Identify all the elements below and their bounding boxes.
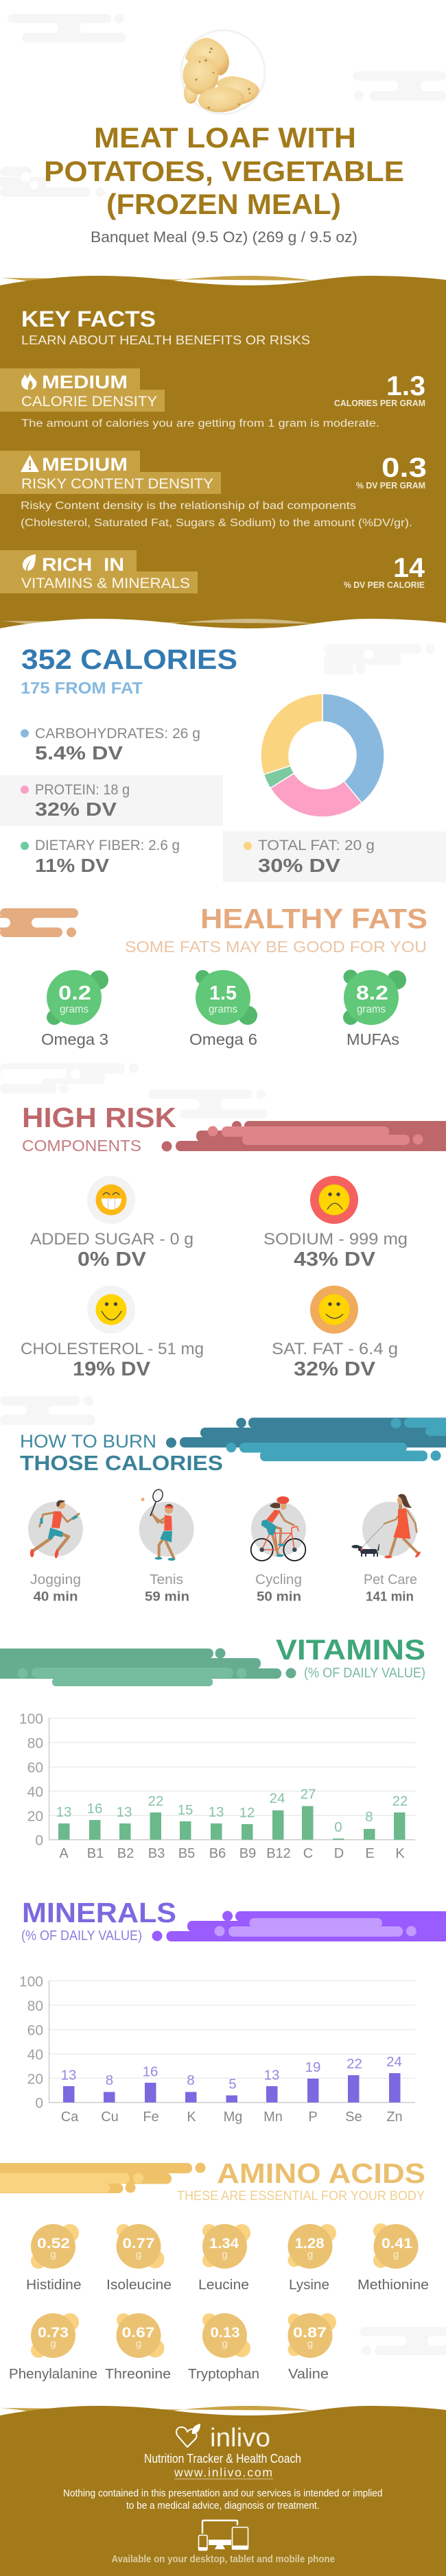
activity labels	[30, 1572, 417, 1604]
bar chart: vitamins: 100	[19, 1712, 43, 1727]
subtitle: Banquet Meal (9.5 Oz) (269 g / 9.5 oz)	[91, 228, 357, 246]
text: website: www.inlivo.com	[174, 2466, 272, 2479]
bubble: leucine	[198, 2224, 250, 2293]
bar chart: vitamins: 13	[56, 1804, 71, 1820]
bar chart: vitamins: B12	[266, 1846, 291, 1861]
logo text: inlivo: inlivo	[210, 2424, 270, 2453]
bubble: valine: 0.87	[293, 2325, 327, 2341]
bar chart: vitamins: 12	[239, 1805, 255, 1821]
bar chart: vitamins: B5	[178, 1846, 195, 1861]
bubble: threonine: g	[136, 2338, 141, 2350]
donut chart: macronutrient split	[261, 694, 384, 817]
bubble: isoleucine: g	[136, 2249, 141, 2260]
food photo: potatoes in a ring	[181, 30, 265, 114]
label box: risky content density: MEDIUM	[42, 454, 128, 475]
legend: dietary fiber: 11% DV	[35, 855, 109, 876]
bubble: phenylalanine: Phenylalanine	[9, 2367, 97, 2382]
activity labels: 40 min	[33, 1590, 78, 1604]
legend: dietary fiber: DIETARY FIBER: 2.6 g	[35, 838, 180, 853]
activity labels: Pet Care	[364, 1572, 417, 1587]
item: saturated fat: SAT. FAT - 6.4 g	[272, 1340, 398, 1358]
bar chart: vitamins: C	[303, 1846, 313, 1861]
bar chart: minerals: 40	[27, 2047, 43, 2063]
legend: total fat: 30% DV	[258, 855, 340, 876]
bubble: histidine: g	[50, 2249, 56, 2260]
icon: warning triangle	[21, 455, 39, 472]
bar chart: minerals: 60	[27, 2023, 43, 2039]
bubble: omega 6: grams	[209, 1004, 237, 1015]
legend: carbohydrates	[21, 726, 200, 764]
bubble: omega 3: Omega 3	[41, 1030, 108, 1048]
activity labels: Tenis	[150, 1572, 183, 1587]
bar chart: vitamins: 24	[270, 1791, 285, 1806]
stat: vitamins and minerals value: % DV PER CALORIE	[344, 580, 425, 590]
bubble: valine: g	[307, 2338, 313, 2350]
title: POTATOES, VEGETABLE	[44, 155, 404, 187]
bar chart: vitamins: B3	[148, 1846, 165, 1861]
item: saturated fat	[272, 1286, 398, 1380]
panel: calories	[0, 643, 446, 882]
bar chart: minerals: Fe	[143, 2110, 159, 2125]
icon: devices	[198, 2520, 248, 2551]
subheading: daily value: (% OF DAILY VALUE)	[304, 1666, 425, 1681]
bubble: phenylalanine	[9, 2313, 97, 2382]
banner: healthy fats cloud	[0, 908, 78, 937]
heading: key facts: KEY FACTS	[21, 307, 156, 331]
heading: those calories: THOSE CALORIES	[20, 1451, 223, 1475]
bar chart: vitamins: B9	[239, 1846, 256, 1861]
bar chart: vitamins: 40	[27, 1784, 43, 1800]
bar chart: minerals: Mg	[224, 2110, 242, 2125]
bar chart: minerals: 22	[347, 2056, 362, 2072]
icon: leaf	[23, 554, 36, 571]
heading: high risk: HIGH RISK	[22, 1102, 176, 1133]
bar chart: minerals: Cu	[101, 2110, 119, 2125]
bar chart: vitamins: 22	[392, 1793, 408, 1809]
activity labels: 141 min	[366, 1590, 414, 1604]
bar chart: vitamins: 0	[334, 1819, 342, 1835]
activity labels: 50 min	[257, 1590, 301, 1604]
activity: tennis	[139, 1488, 194, 1561]
activity: pet care	[351, 1494, 421, 1559]
bubble: lysine: g	[307, 2249, 313, 2260]
stat: risky content density value: % DV PER GRAM	[356, 481, 425, 491]
bubble: histidine: 0.52	[37, 2236, 70, 2252]
icon: flame	[21, 372, 36, 390]
bubble: phenylalanine: 0.73	[38, 2325, 69, 2341]
logo: inlivo heart	[176, 2424, 200, 2447]
bar chart: vitamins: 27	[301, 1786, 316, 1802]
bar chart: vitamins: 0	[35, 1833, 43, 1849]
text: availability: Available on your desktop, tablet and mobile phone	[111, 2553, 335, 2565]
legend: total fat: TOTAL FAT: 20 g	[258, 838, 375, 853]
bar chart: vitamins: D	[334, 1846, 344, 1861]
bar chart: minerals: P	[308, 2110, 318, 2125]
item: added sugar	[30, 1176, 193, 1271]
subheading: healthy fats: SOME FATS MAY BE GOOD FOR YOU	[125, 938, 427, 956]
item: sodium: SODIUM - 999 mg	[263, 1230, 408, 1249]
activity labels: 59 min	[145, 1590, 189, 1604]
bubble: omega 3: grams	[60, 1004, 89, 1015]
subheading: key facts: LEARN ABOUT HEALTH BENEFITS OR RISKS	[21, 333, 310, 347]
panel: vitamins	[0, 1633, 425, 1861]
background cloud: burn	[0, 1396, 95, 1425]
bubble: isoleucine: Isoleucine	[106, 2278, 172, 2293]
bubble: mufas: 8.2	[356, 982, 388, 1004]
activity: cycling	[251, 1496, 306, 1561]
legend: protein: 32% DV	[35, 799, 117, 820]
bar chart: vitamins: 16	[87, 1801, 102, 1817]
bar chart: minerals: Se	[345, 2110, 362, 2125]
bubble: tryptophan: Tryptophan	[188, 2367, 259, 2382]
bar chart: minerals: 8	[106, 2072, 113, 2088]
background clouds: high risk	[0, 1063, 268, 1118]
legend: carbohydrates: CARBOHYDRATES: 26 g	[35, 726, 200, 742]
bubble: methionine: g	[393, 2249, 399, 2260]
bar chart: vitamins: 15	[178, 1802, 193, 1818]
heading: healthy fats: HEALTHY FATS	[200, 903, 427, 934]
background clouds: header	[0, 14, 446, 197]
bubble: mufas: MUFAs	[347, 1030, 399, 1048]
legend: total fat	[223, 831, 446, 882]
bubble: tryptophan: 0.13	[210, 2325, 240, 2341]
bubble: lysine: Lysine	[289, 2278, 329, 2293]
bubble: leucine: 1.34	[209, 2236, 239, 2252]
bubble: tryptophan	[188, 2313, 259, 2382]
bubble: threonine: 0.67	[122, 2325, 155, 2341]
panel: minerals	[19, 1897, 446, 2125]
item: added sugar: ADDED SUGAR - 0 g	[30, 1230, 193, 1249]
activity labels: Jogging	[30, 1572, 81, 1587]
bubble: lysine	[288, 2224, 336, 2293]
bubble: isoleucine	[106, 2224, 172, 2293]
bar chart: vitamins: 80	[27, 1736, 43, 1751]
footer	[0, 2406, 446, 2576]
bar chart: vitamins: 8	[365, 1809, 373, 1825]
stat: risky content density value: 0.3	[382, 453, 427, 483]
banner: amino acids	[0, 2162, 206, 2193]
bubble: mufas: grams	[357, 1004, 386, 1015]
bar chart: minerals: Mn	[263, 2110, 283, 2125]
bar chart: vitamins: 60	[27, 1760, 43, 1776]
text: risky content description: (Cholesterol, Saturated Fat, Sugars & Sodium) to the amount (%DV/gr).	[21, 517, 412, 529]
stat: calorie density value: CALORIES PER GRAM	[334, 399, 425, 408]
item: sodium	[263, 1176, 408, 1271]
label box: risky content density	[0, 451, 221, 494]
panel: amino acids	[0, 2158, 446, 2382]
banner: minerals	[152, 1911, 446, 1941]
bar chart: vitamins: 13	[117, 1804, 132, 1820]
activity labels: Cycling	[255, 1572, 302, 1587]
bubble: lysine: 1.28	[295, 2236, 325, 2252]
panel: how to burn calories	[0, 1396, 446, 1604]
background cloud: amino acids	[357, 2327, 446, 2355]
heading: calories: 352 CALORIES	[21, 643, 237, 675]
subheading: calories from fat: 175 FROM FAT	[21, 679, 143, 698]
bar chart: vitamins: 13	[209, 1804, 224, 1820]
bar chart: vitamins: 20	[27, 1808, 43, 1824]
panel: healthy fats	[0, 903, 427, 1048]
label box: risky content density: RISKY CONTENT DENSITY	[21, 476, 213, 492]
stat: vitamins and minerals value: 14	[393, 553, 425, 583]
banner: vitamins	[0, 1648, 296, 1686]
stat: vitamins and minerals value	[344, 553, 425, 590]
bubble: methionine	[357, 2223, 429, 2293]
banner: burn	[166, 1417, 446, 1461]
bubble: histidine: Histidine	[26, 2278, 81, 2293]
bar chart: minerals: K	[187, 2110, 196, 2125]
bar chart: minerals: 16	[143, 2064, 158, 2080]
bubble: valine: Valine	[288, 2367, 329, 2382]
bubble: methionine: Methionine	[357, 2278, 429, 2293]
label box: calorie density: CALORIE DENSITY	[21, 394, 157, 410]
text: disclaimer: Nothing contained in this presentation and our services is intended or implied	[63, 2488, 383, 2499]
bubble: phenylalanine: g	[50, 2338, 56, 2350]
stat: calorie density value: 1.3	[386, 371, 425, 401]
text: disclaimer	[63, 2488, 383, 2512]
heading: vitamins: VITAMINS	[276, 1633, 425, 1666]
bar chart: minerals: 20	[27, 2071, 43, 2087]
background cloud: calories	[324, 644, 435, 674]
item: added sugar: 0% DV	[78, 1249, 147, 1271]
legend: carbohydrates: 5.4% DV	[35, 742, 123, 764]
item: cholesterol	[21, 1286, 204, 1380]
banner: high risk	[162, 1121, 446, 1151]
bubble: leucine: g	[222, 2249, 228, 2260]
text: disclaimer: to be a medical advice, diagnosis or treatment.	[126, 2500, 320, 2512]
bar chart: vitamins: E	[365, 1846, 375, 1861]
bubble: omega 6: 1.5	[209, 982, 237, 1004]
subheading: amino acids: THESE ARE ESSENTIAL FOR YOUR BODY	[177, 2188, 425, 2203]
label box: rich in vitamins and minerals	[0, 550, 198, 593]
stat: calorie density value	[334, 371, 425, 408]
legend: protein	[0, 775, 223, 826]
bubble: methionine: 0.41	[382, 2236, 412, 2252]
subheading: daily value: (% OF DAILY VALUE)	[21, 1928, 142, 1943]
bar chart: vitamins: B6	[209, 1846, 226, 1861]
heading: minerals: MINERALS	[22, 1897, 176, 1928]
text: calorie density description: The amount of calories you are getting from 1 gram is moderate.	[21, 418, 379, 429]
bar chart: minerals: 24	[386, 2054, 402, 2070]
bar chart: vitamins: 22	[148, 1793, 163, 1809]
bubble: mufas	[343, 970, 406, 1048]
text: risky content description	[21, 500, 412, 529]
bar chart: minerals	[19, 1974, 415, 2125]
label box: rich in vitamins and minerals: VITAMINS & MINERALS	[21, 576, 190, 591]
text: risky content description: Risky Content density is the relationship of bad components	[21, 500, 356, 512]
bubble: omega 3: 0.2	[58, 982, 91, 1004]
bubble: omega 6: Omega 6	[189, 1030, 257, 1048]
bubble: leucine: Leucine	[198, 2278, 249, 2293]
bubble: threonine	[105, 2313, 171, 2382]
bar chart: vitamins: B1	[87, 1846, 104, 1861]
legend: protein: PROTEIN: 18 g	[35, 782, 130, 798]
label box: calorie density: MEDIUM	[42, 372, 128, 392]
subheading: components: COMPONENTS	[22, 1137, 141, 1155]
bubble: tryptophan: g	[222, 2338, 228, 2350]
title: (FROZEN MEAL)	[106, 188, 341, 220]
label box: calorie density	[0, 368, 165, 412]
bar chart: minerals: 5	[228, 2076, 237, 2092]
bubble: omega 3	[41, 970, 108, 1048]
title	[44, 121, 404, 220]
item: cholesterol: CHOLESTEROL - 51 mg	[21, 1340, 204, 1358]
panel: high risk components	[0, 1063, 446, 1380]
bubble: isoleucine: 0.77	[122, 2236, 155, 2252]
bar chart: minerals: 100	[19, 1974, 43, 1989]
label box: rich in vitamins and minerals: RICH IN	[42, 554, 124, 575]
bar chart: vitamins: B2	[117, 1846, 134, 1861]
text: tagline: Nutrition Tracker & Health Coach	[144, 2452, 301, 2466]
heading: how to burn: HOW TO BURN	[20, 1431, 156, 1452]
bar chart: minerals: Ca	[61, 2110, 79, 2125]
bar chart: minerals: 13	[264, 2068, 279, 2083]
bar chart: minerals: 80	[27, 1998, 43, 2014]
legend: dietary fiber	[21, 838, 180, 876]
heading: amino acids: AMINO ACIDS	[217, 2158, 425, 2189]
bubble: histidine	[26, 2224, 81, 2293]
bar chart: minerals: 8	[187, 2072, 195, 2088]
bar chart: vitamins	[19, 1712, 415, 1861]
item: saturated fat: 32% DV	[294, 1358, 376, 1380]
bar chart: minerals: 0	[35, 2096, 43, 2112]
bubble: omega 6	[189, 970, 257, 1048]
bar chart: minerals: 19	[305, 2059, 320, 2075]
item: cholesterol: 19% DV	[73, 1358, 151, 1380]
panel: key facts band	[0, 276, 446, 638]
title: MEAT LOAF WITH	[94, 121, 356, 154]
activity: jogging	[28, 1500, 83, 1559]
item: sodium: 43% DV	[294, 1249, 376, 1271]
stat: risky content density value	[356, 453, 427, 491]
bar chart: minerals: 13	[61, 2068, 76, 2083]
bar chart: minerals: Zn	[386, 2110, 403, 2125]
bubble: threonine: Threonine	[105, 2367, 171, 2382]
bar chart: vitamins: K	[395, 1846, 405, 1861]
bar chart: vitamins: A	[59, 1846, 69, 1861]
bubble: valine	[288, 2313, 336, 2382]
